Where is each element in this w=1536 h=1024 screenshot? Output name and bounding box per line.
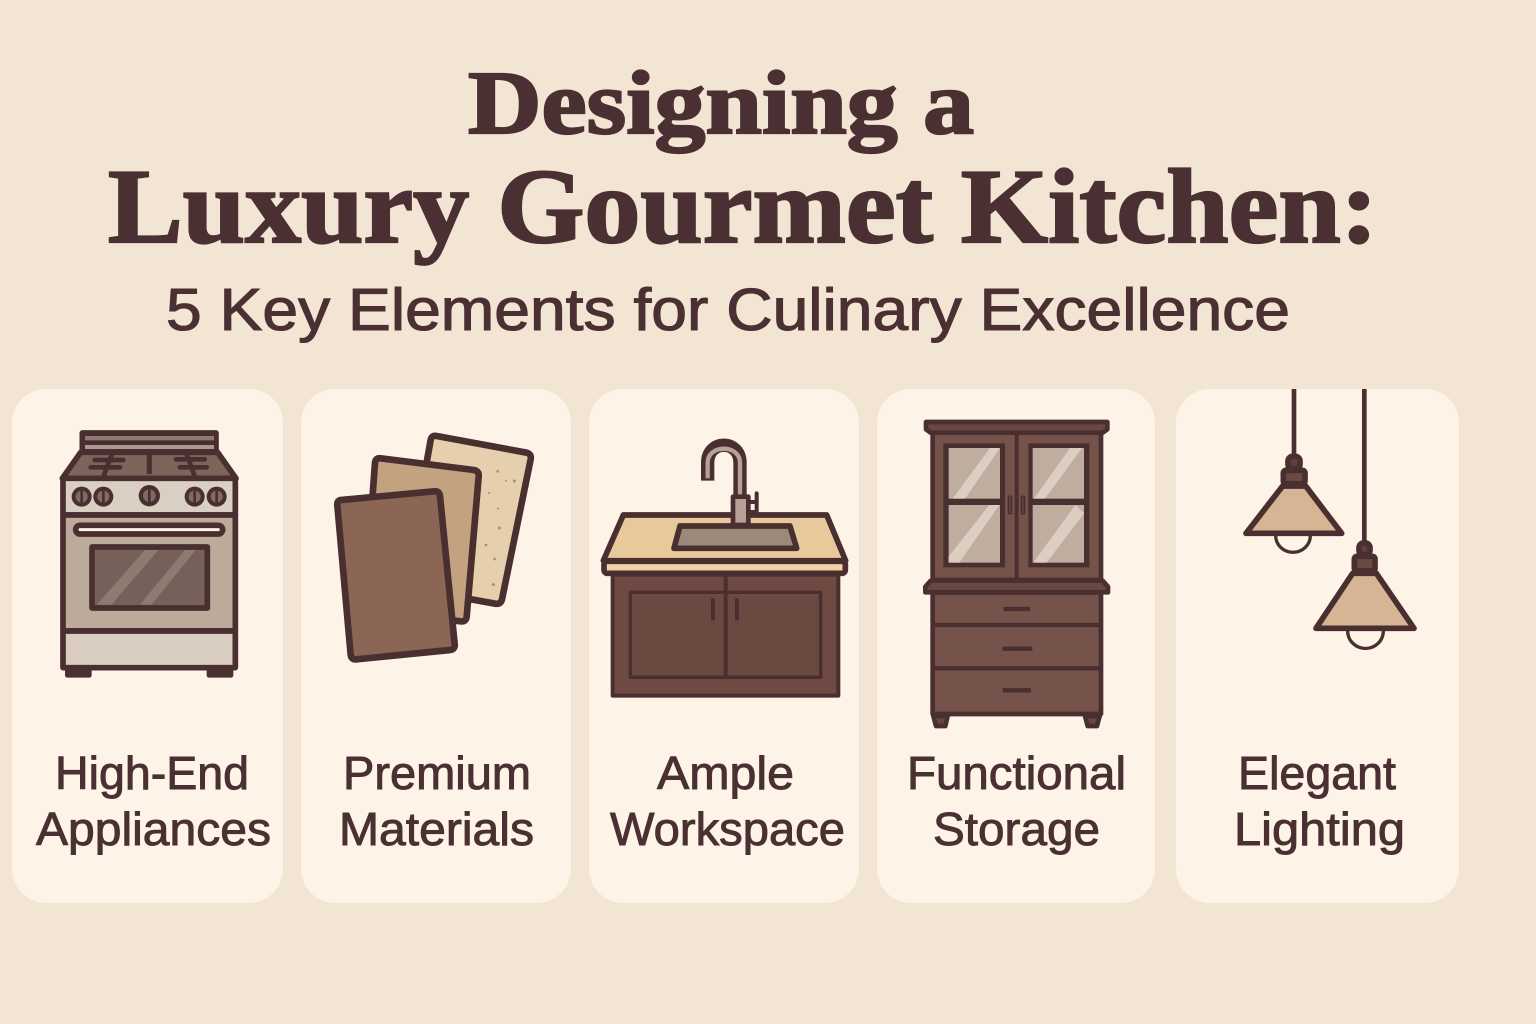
- panel: high-end appliances: [12, 389, 283, 903]
- label: Functional Storage: Functional: [907, 747, 1126, 799]
- panel: elegant lighting: [1176, 389, 1459, 903]
- icon: pendant lamps: [1246, 389, 1414, 648]
- panel: premium materials: [301, 389, 571, 903]
- icon: sink and counter: [603, 445, 846, 696]
- label: High-End Appliances: High-End: [55, 747, 249, 799]
- subtitle: 5 Key Elements for Culinary Excellence: [166, 277, 1290, 343]
- title: Designing a: [468, 54, 974, 153]
- icon: cabinet: [925, 422, 1108, 726]
- label: Premium Materials: Premium: [343, 747, 531, 799]
- panel: ample workspace: [589, 389, 859, 903]
- title: Luxury Gourmet Kitchen:: [108, 148, 1378, 265]
- label: Ample Workspace: Workspace: [610, 803, 845, 855]
- label: Functional Storage: [907, 747, 1126, 855]
- label: High-End Appliances: Appliances: [36, 803, 271, 855]
- label: Functional Storage: Storage: [933, 803, 1100, 855]
- label: Elegant Lighting: Elegant: [1238, 747, 1396, 799]
- label: Elegant Lighting: Lighting: [1234, 803, 1405, 855]
- label: Premium Materials: [339, 747, 534, 855]
- panel: functional storage: [877, 389, 1155, 903]
- icon: material samples: [337, 436, 531, 659]
- label: High-End Appliances: [36, 747, 271, 855]
- label: Premium Materials: Materials: [339, 803, 534, 855]
- icon: stove: [62, 433, 236, 678]
- label: Ample Workspace: Ample: [657, 747, 794, 799]
- label: Ample Workspace: [610, 747, 845, 855]
- label: Elegant Lighting: [1234, 747, 1405, 855]
- title: [108, 54, 1378, 265]
